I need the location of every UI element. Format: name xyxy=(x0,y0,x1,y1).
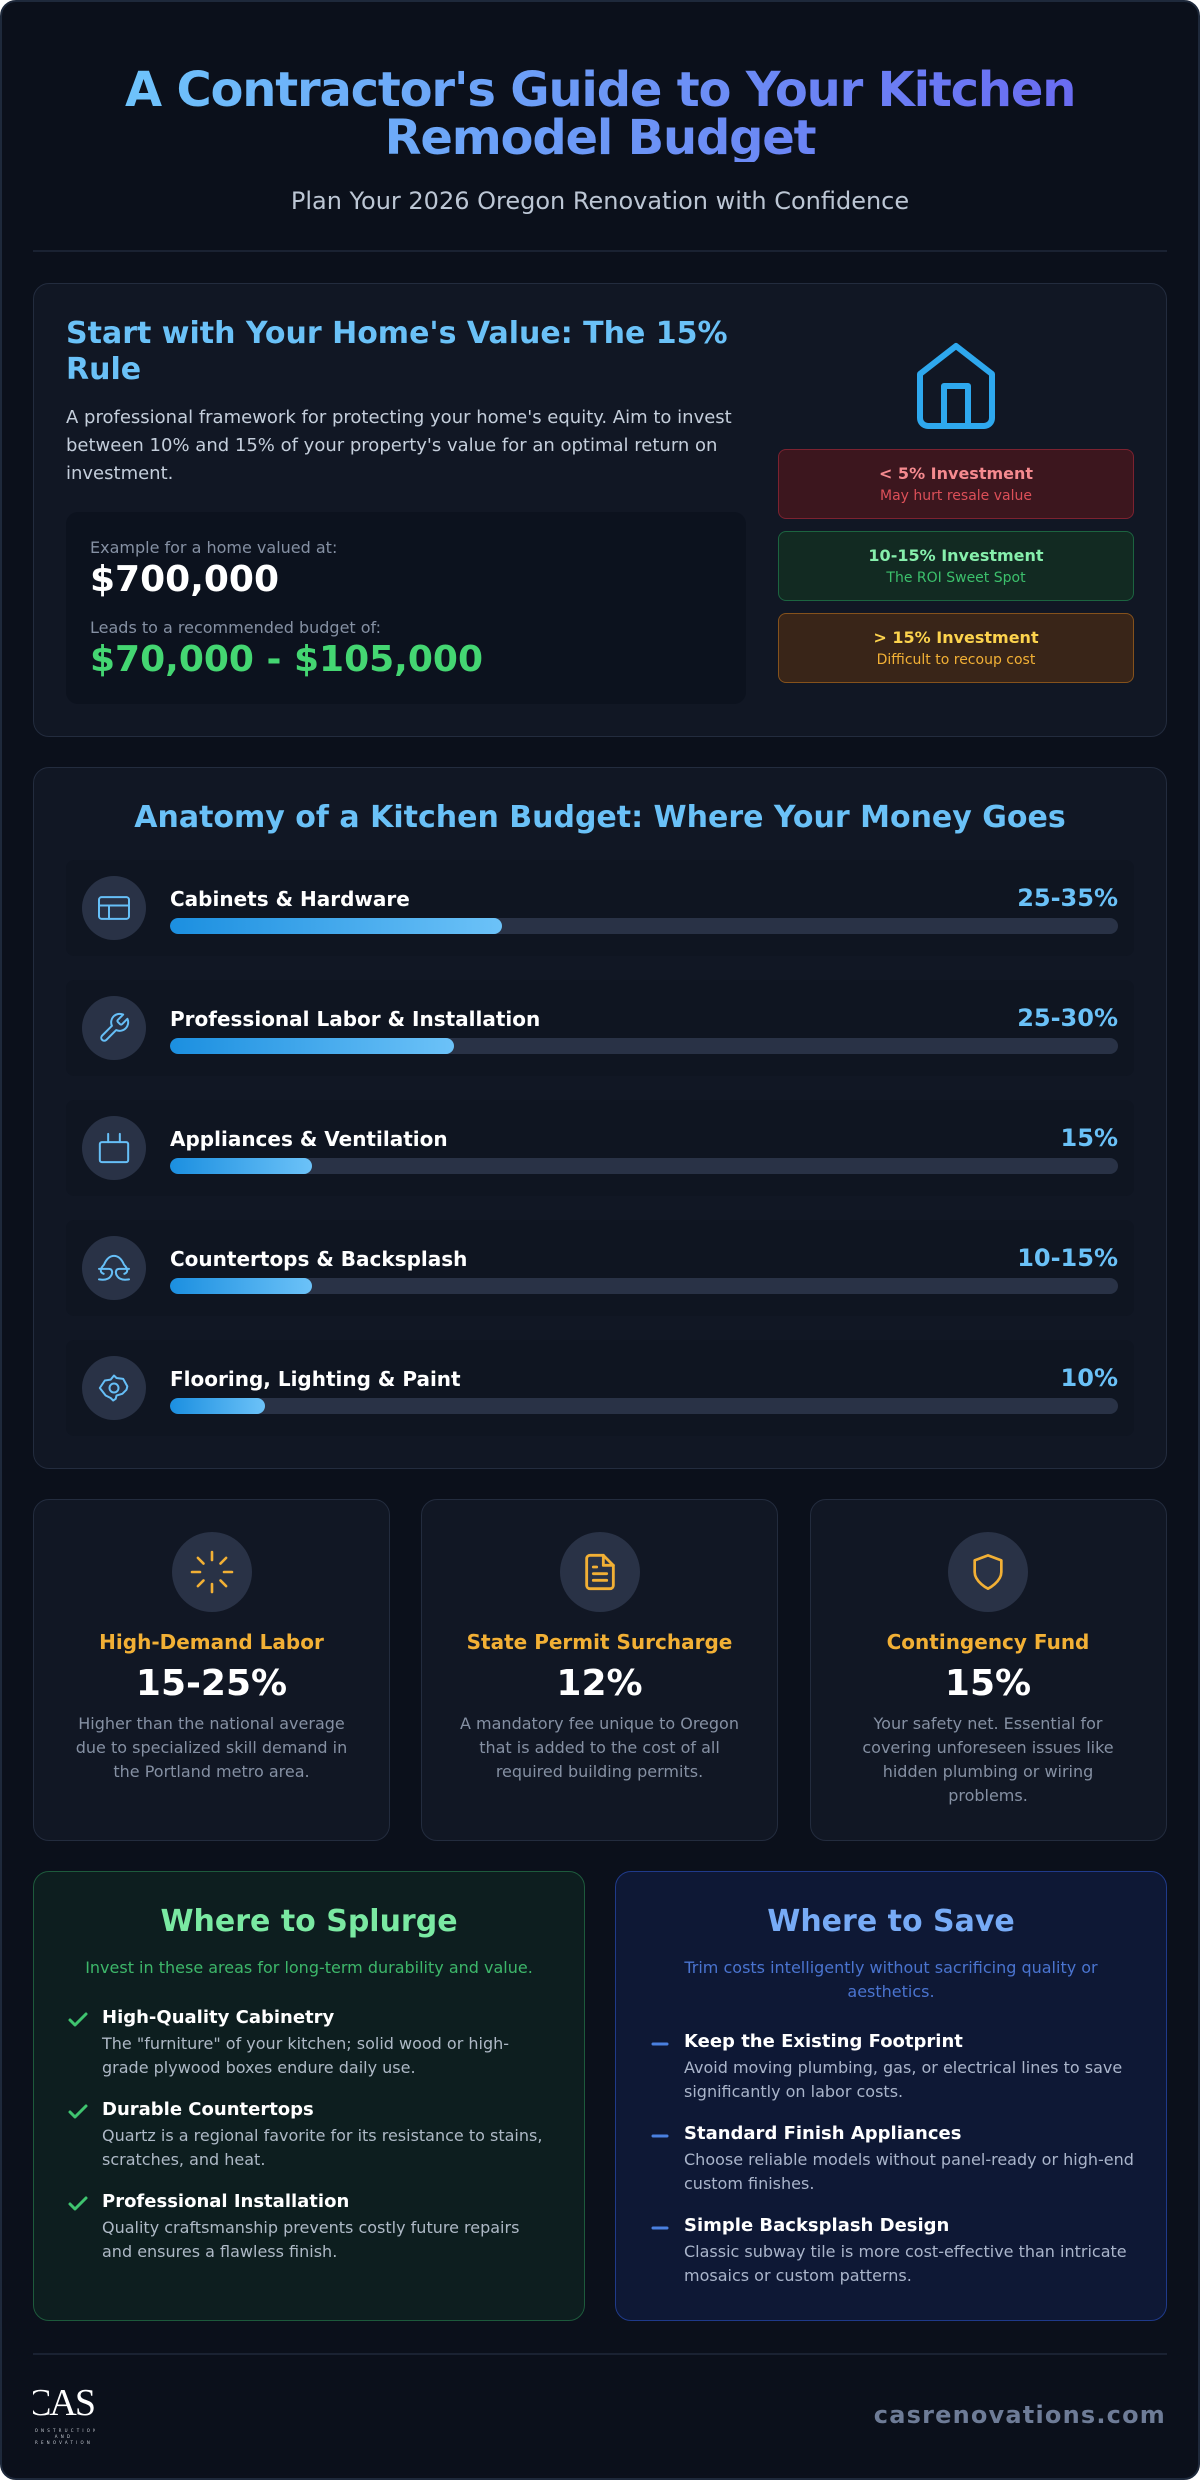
row: flooring xyxy=(66,1340,1134,1436)
item: installation xyxy=(68,2191,519,2261)
panel: where to splurge xyxy=(33,1871,585,2321)
item: backsplash xyxy=(652,2215,1127,2285)
heading: save: Where to Save xyxy=(767,1904,1015,1939)
icon: minus xyxy=(652,2226,668,2230)
description: due to specialized skill demand in xyxy=(76,1738,347,1757)
bar: countertops: 10-15% xyxy=(1017,1244,1118,1272)
icon: flooring xyxy=(82,1356,146,1420)
rule description xyxy=(66,407,732,484)
icon: wrench xyxy=(82,996,146,1060)
bar: labor xyxy=(170,1004,1118,1054)
description: problems. xyxy=(948,1786,1028,1805)
item text: Professional Installation xyxy=(102,2191,349,2212)
subtitle: Plan Your 2026 Oregon Renovation with Confidence xyxy=(291,187,909,215)
item text xyxy=(102,2191,519,2261)
rule description: investment. xyxy=(66,463,173,484)
icon: spark xyxy=(172,1532,252,1612)
investment levels column xyxy=(778,342,1134,683)
item: appliances xyxy=(652,2123,1134,2193)
status: over 15%: Difficult to recoup cost xyxy=(877,652,1035,668)
icon: check xyxy=(68,2196,88,2211)
logo tagline xyxy=(33,2428,95,2445)
item text: Standard Finish Appliances xyxy=(684,2123,961,2144)
card: high-demand labor xyxy=(33,1499,390,1841)
item text: Keep the Existing Footprint xyxy=(684,2031,963,2052)
bar: appliances: Appliances & Ventilation xyxy=(170,1127,448,1151)
card: contingency fund xyxy=(810,1499,1166,1841)
heading: 15% rule: Start with Your Home's Value: The 15% xyxy=(66,316,728,351)
item text: Avoid moving plumbing, gas, or electrical lines to save xyxy=(684,2058,1122,2077)
status: under 5%: < 5% Investment xyxy=(879,464,1033,483)
item text xyxy=(684,2123,1134,2193)
description xyxy=(460,1714,739,1781)
bar: countertops xyxy=(170,1244,1118,1294)
bar: cabinets xyxy=(170,884,1118,934)
item text: Classic subway tile is more cost-effective than intricate xyxy=(684,2242,1127,2261)
description: A mandatory fee unique to Oregon xyxy=(460,1714,739,1733)
item text: Quartz is a regional favorite for its resistance to stains, xyxy=(102,2126,542,2145)
icon: shield xyxy=(948,1532,1028,1612)
label: High-Demand Labor xyxy=(99,1630,324,1654)
status: 10-15%: 10-15% Investment xyxy=(868,546,1044,565)
item text: Simple Backsplash Design xyxy=(684,2215,949,2236)
item text: scratches, and heat. xyxy=(102,2150,265,2169)
label: Contingency Fund xyxy=(887,1630,1089,1654)
logo tagline: RENOVATION xyxy=(35,2440,93,2445)
recommended budget value: $70,000 - $105,000 xyxy=(90,639,483,680)
item text xyxy=(684,2215,1127,2285)
save intro: Trim costs intelligently without sacrificing quality or xyxy=(684,1958,1098,1977)
description: Your safety net. Essential for xyxy=(874,1714,1102,1733)
bar: cabinets: 25-35% xyxy=(1017,884,1118,912)
card: permit surcharge xyxy=(421,1499,778,1841)
heading: 15% rule: Rule xyxy=(66,352,141,387)
description: covering unforeseen issues like xyxy=(862,1738,1114,1757)
logo tagline: AND xyxy=(55,2434,73,2439)
row: appliances xyxy=(66,1100,1134,1196)
panel: the 15% rule xyxy=(33,283,1167,737)
item: countertops xyxy=(68,2099,542,2169)
icon: countertop xyxy=(82,1236,146,1300)
row: cabinets xyxy=(66,860,1134,956)
label: State Permit Surcharge xyxy=(467,1630,732,1654)
description xyxy=(862,1714,1114,1805)
bar: flooring xyxy=(170,1364,1118,1414)
status: 10-15%: The ROI Sweet Spot xyxy=(886,570,1026,586)
item text: custom finishes. xyxy=(684,2174,814,2193)
item text: Quality craftsmanship prevents costly future repairs xyxy=(102,2218,519,2237)
item text: mosaics or custom patterns. xyxy=(684,2266,912,2285)
title: Remodel Budget xyxy=(385,110,815,166)
description: the Portland metro area. xyxy=(113,1762,310,1781)
example home value: $700,000 xyxy=(90,559,279,600)
item text: The "furniture" of your kitchen; solid wood or high- xyxy=(102,2034,509,2053)
rule description: A professional framework for protecting your home's equity. Aim to invest xyxy=(66,407,732,428)
panel: where to save xyxy=(615,1871,1167,2321)
save intro: aesthetics. xyxy=(847,1982,935,2001)
item text xyxy=(684,2031,1122,2101)
example home value label: Example for a home valued at: xyxy=(90,538,337,557)
bar: labor: 25-30% xyxy=(1017,1004,1118,1032)
icon: minus xyxy=(652,2042,668,2046)
heading: budget anatomy: Anatomy of a Kitchen Budget: Where Your Money Goes xyxy=(134,800,1066,835)
item text: Durable Countertops xyxy=(102,2099,314,2120)
logo xyxy=(33,2382,95,2445)
figure: 15-25% xyxy=(136,1663,287,1704)
recommended budget label: Leads to a recommended budget of: xyxy=(90,618,381,637)
status: over 15%: > 15% Investment xyxy=(873,628,1039,647)
save intro xyxy=(684,1958,1098,2001)
item text: High-Quality Cabinetry xyxy=(102,2007,334,2028)
status: over 15% xyxy=(778,613,1134,683)
example calculation box xyxy=(66,512,746,704)
item text xyxy=(102,2007,509,2077)
heading: splurge: Where to Splurge xyxy=(160,1904,458,1939)
bar: labor: Professional Labor & Installation xyxy=(170,1007,540,1031)
figure: 15% xyxy=(945,1663,1031,1704)
bar: cabinets: Cabinets & Hardware xyxy=(170,887,410,911)
item text: Choose reliable models without panel-ready or high-end xyxy=(684,2150,1134,2169)
title xyxy=(125,66,1075,162)
item: footprint xyxy=(652,2031,1122,2101)
website: casrenovations.com xyxy=(874,2401,1166,2429)
description: Higher than the national average xyxy=(78,1714,345,1733)
row: countertops xyxy=(66,1220,1134,1316)
heading: 15% rule xyxy=(66,316,728,387)
description xyxy=(76,1714,347,1781)
description: that is added to the cost of all xyxy=(479,1738,720,1757)
rule explanation column xyxy=(66,316,732,680)
title: A Contractor's Guide to Your Kitchen xyxy=(125,62,1075,118)
status: 10-15% xyxy=(778,531,1134,601)
bar: appliances xyxy=(170,1124,1118,1174)
item: cabinetry xyxy=(68,2007,509,2077)
description: hidden plumbing or wiring xyxy=(883,1762,1093,1781)
row: labor xyxy=(66,980,1134,1076)
bar: flooring: Flooring, Lighting & Paint xyxy=(170,1367,461,1391)
item text: significantly on labor costs. xyxy=(684,2082,903,2101)
status: under 5% xyxy=(778,449,1134,519)
icon: house xyxy=(917,342,995,429)
icon: check xyxy=(68,2104,88,2119)
figure: 12% xyxy=(556,1663,643,1704)
icon: check xyxy=(68,2012,88,2027)
bar: flooring: 10% xyxy=(1061,1364,1118,1392)
splurge intro: Invest in these areas for long-term durability and value. xyxy=(85,1958,533,1977)
bar: countertops: Countertops & Backsplash xyxy=(170,1247,467,1271)
icon: appliance xyxy=(82,1116,146,1180)
item text xyxy=(102,2099,542,2169)
bar: appliances: 15% xyxy=(1061,1124,1118,1152)
description: required building permits. xyxy=(496,1762,703,1781)
rule description: between 10% and 15% of your property's value for an optimal return on xyxy=(66,435,717,456)
icon: minus xyxy=(652,2134,668,2138)
item text: grade plywood boxes endure daily use. xyxy=(102,2058,416,2077)
icon: cabinet xyxy=(82,876,146,940)
status: under 5%: May hurt resale value xyxy=(880,488,1032,504)
item text: and ensures a flawless finish. xyxy=(102,2242,337,2261)
icon: document xyxy=(560,1532,640,1612)
panel: budget breakdown xyxy=(33,767,1167,1469)
